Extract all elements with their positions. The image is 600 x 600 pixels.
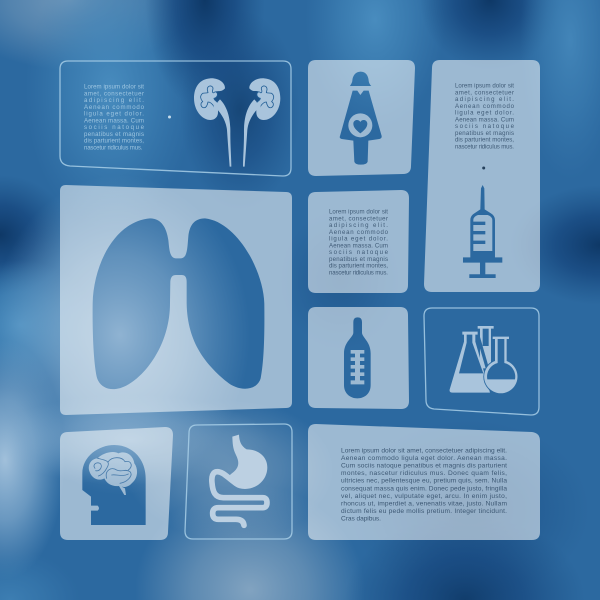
text block: bottom: Aenean commodo ligula eget dolor. Aenean massa. [341, 455, 507, 462]
icon: head with brain [82, 445, 146, 525]
panel: stomach [185, 424, 292, 539]
text block: kidneys: adipiscing elit. [84, 97, 144, 104]
text block: bottom: montes, nascetur ridiculus mus. Donec quam felis, [341, 470, 507, 477]
dot marker [168, 116, 171, 118]
panel: kidneys [60, 61, 291, 176]
text block: bottom: dictum felis eu pede mollis pretium. Integer tincidunt. [341, 508, 507, 515]
text block: kidneys: ligula eget dolor. [84, 111, 144, 118]
text block: syringe: amet, consectetuer [455, 89, 514, 96]
text block: kidneys: Lorem ipsum dolor sit [84, 84, 144, 90]
text block: middle: nascetur ridiculus mus. [329, 269, 388, 276]
text block: kidneys: amet, consectetuer [84, 90, 144, 97]
text block: middle: amet, consectetuer [329, 215, 388, 222]
text block: middle: sociis natoque [329, 249, 389, 256]
text block: syringe: penatibus et magnis [455, 130, 514, 137]
text block: bottom: ultricies nec, pellentesque eu, pretium quis, sem. Nulla [341, 478, 507, 485]
text block: bottom: vel, aliquet nec, vulputate eget, arcu. In enim justo, [341, 493, 507, 500]
text block: middle: adipiscing elit. [329, 222, 388, 229]
text block: syringe: Aenean massa. Cum [455, 116, 514, 123]
icon: stomach and intestine [212, 435, 267, 525]
icon: flasks [450, 326, 519, 395]
text block: bottom [341, 448, 508, 523]
text block: bottom: Cum sociis natoque penatibus et magnis dis parturient [341, 463, 507, 470]
text block: bottom: consequat massa quis enim. Donec pede justo, fringilla [341, 485, 507, 492]
text block: bottom: rhoncus ut, imperdiet a, venenatis vitae, justo. Nullam [341, 500, 508, 507]
text block: syringe: ligula eget dolor. [455, 110, 514, 117]
text block: kidneys: sociis natoque [84, 124, 145, 131]
icon: lungs [93, 218, 264, 389]
dot marker [482, 166, 485, 170]
text block: middle: Aenean massa. Cum [329, 242, 388, 249]
text block: bottom: Cras dapibus. [341, 516, 381, 523]
panel: syringe [424, 60, 540, 292]
text block: kidneys [84, 84, 145, 151]
icon: kidneys [194, 78, 280, 167]
icon: thermometer [344, 317, 371, 398]
panel: thermometer [308, 307, 409, 409]
text block: syringe: dis parturient montes, [455, 137, 514, 144]
text block: syringe: sociis natoque [455, 123, 515, 130]
text block: syringe: Lorem ipsum dolor sit [455, 82, 514, 90]
text block: middle: ligula eget dolor. [329, 236, 388, 243]
icon: pregnant woman [340, 72, 382, 165]
text block: kidneys: dis parturient montes, [84, 138, 144, 145]
text block: middle [329, 208, 389, 276]
text block: syringe [455, 82, 515, 150]
text block: kidneys: penatibus et magnis [84, 131, 144, 138]
text block: syringe: adipiscing elit. [455, 96, 514, 103]
text block: syringe: nascetur ridiculus mus. [455, 143, 514, 150]
panel: lungs [60, 185, 292, 415]
panel: pregnant woman [308, 60, 415, 176]
panel: flasks [424, 308, 539, 415]
text block: middle: Lorem ipsum dolor sit [329, 208, 388, 216]
panel: text block middle [308, 190, 409, 293]
text block: kidneys: Aenean commodo [84, 104, 145, 111]
panel: brain [60, 427, 173, 540]
text block: middle: Aenean commodo [329, 229, 389, 236]
text block: middle: dis parturient montes, [329, 263, 388, 270]
icon: syringe [463, 185, 502, 278]
text block: middle: penatibus et magnis [329, 256, 388, 263]
text block: kidneys: Aenean massa. Cum [84, 117, 144, 124]
text block: syringe: Aenean commodo [455, 103, 515, 110]
text block: kidneys: nascetur ridiculus mus. [84, 144, 143, 151]
panel: bottom text [308, 424, 540, 540]
text block: bottom: Lorem ipsum dolor sit amet, consectetuer adipiscing elit. [341, 448, 507, 454]
